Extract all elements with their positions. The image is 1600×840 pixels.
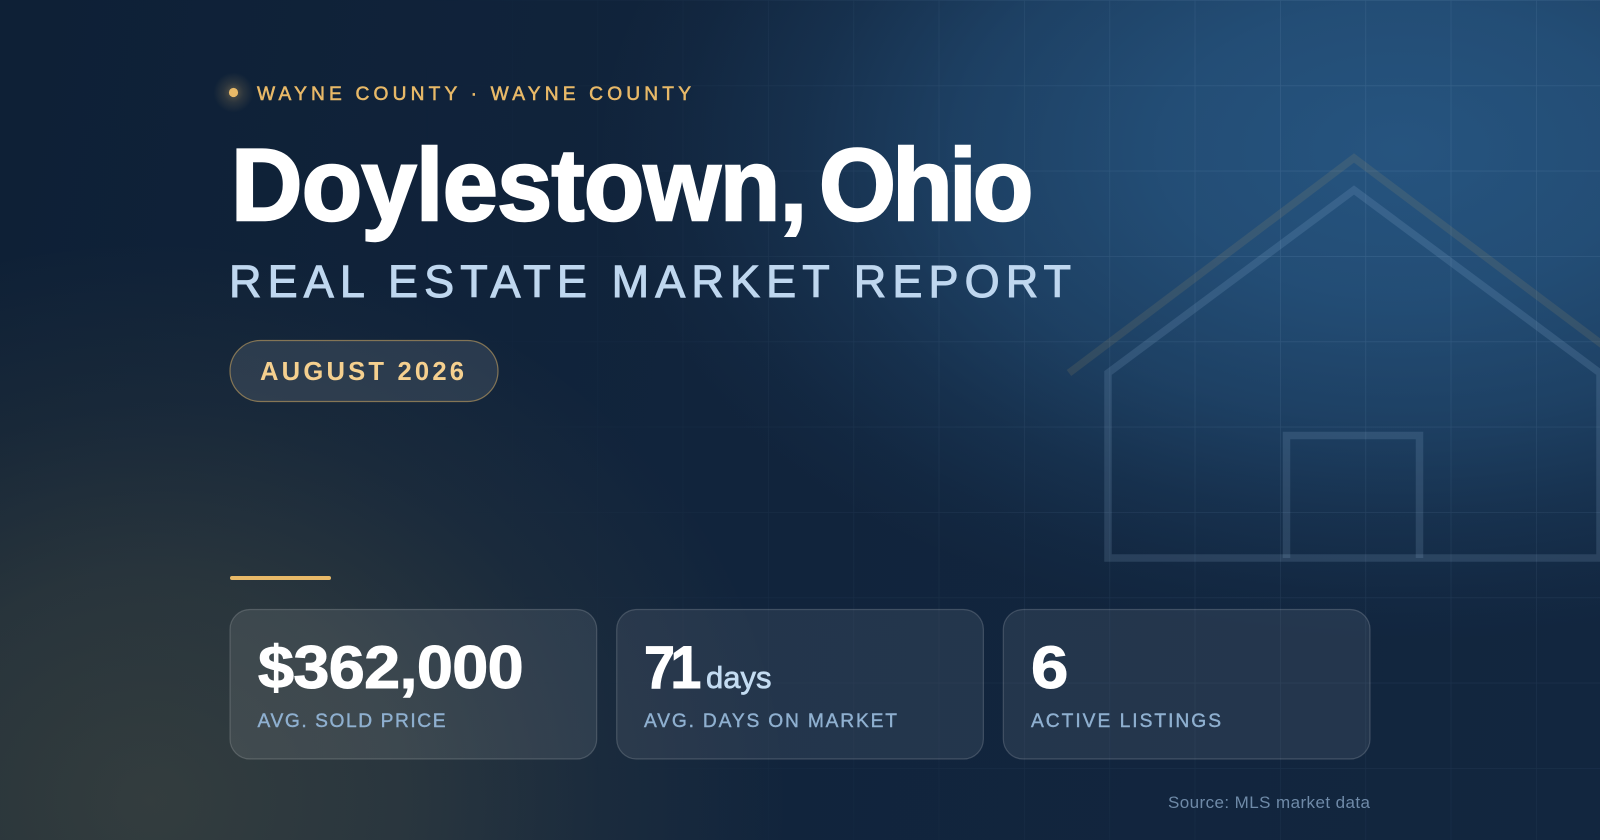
stat card: active listings xyxy=(1003,610,1370,759)
value: $362,000 xyxy=(258,634,524,701)
value: 71 xyxy=(644,635,700,701)
title: Doylestown, xyxy=(231,129,807,242)
icon: house outline xyxy=(1069,158,1600,558)
source note: Source: MLS market data xyxy=(1168,793,1371,812)
label: AVG. DAYS ON MARKET xyxy=(644,711,897,732)
stat card: average sold price xyxy=(230,610,597,759)
label: AVG. SOLD PRICE xyxy=(258,711,446,732)
date pill xyxy=(230,340,498,402)
house door xyxy=(1286,436,1420,558)
title: Ohio xyxy=(819,129,1033,242)
eyebrow: county: WAYNE COUNTY · WAYNE COUNTY xyxy=(257,84,691,105)
label: ACTIVE LISTINGS xyxy=(1031,711,1221,732)
unit: days xyxy=(706,660,771,695)
house body xyxy=(1108,190,1600,558)
subtitle: REAL ESTATE MARKET REPORT xyxy=(229,256,1071,307)
date pill: AUGUST 2026 xyxy=(260,358,464,386)
house roof line xyxy=(1069,158,1600,373)
stat card: average days on market xyxy=(617,610,983,759)
value: 6 xyxy=(1031,634,1068,701)
accent divider xyxy=(230,576,331,580)
glowing location dot xyxy=(214,72,254,112)
